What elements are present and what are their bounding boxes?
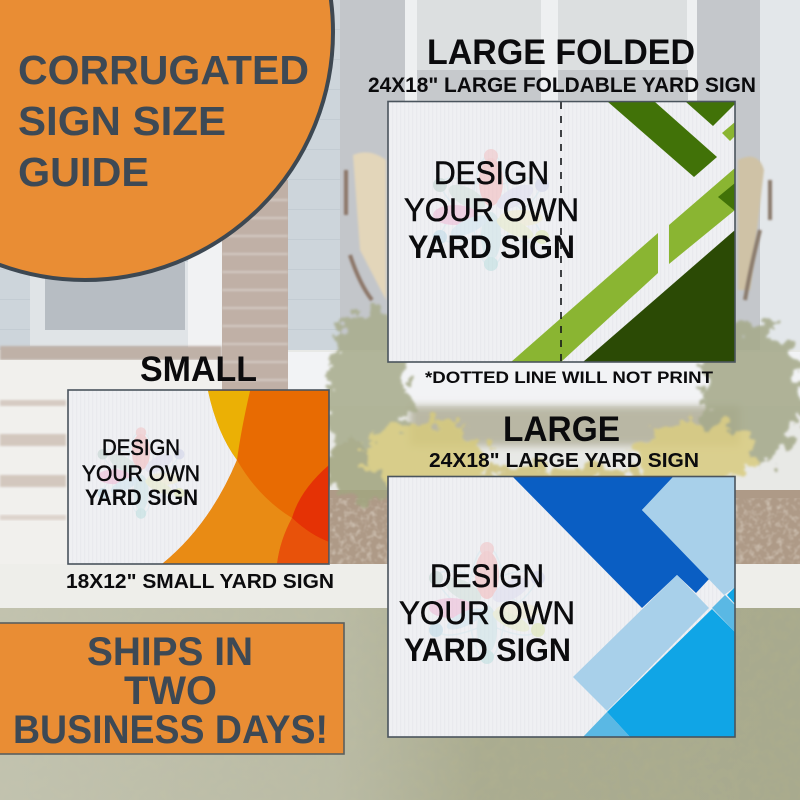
- orange curved design: [162, 390, 329, 564]
- green geometric design: [511, 102, 735, 362]
- callout: ships in two business days: BUSINESS DAYS!: [13, 708, 328, 752]
- panel: small sign: [68, 390, 329, 564]
- sign text: DESIGN: [102, 435, 180, 460]
- note: dotted line will not print: *DOTTED LINE WILL NOT PRINT: [425, 368, 714, 387]
- title: corrugated sign size guide: SIGN SIZE: [18, 98, 226, 144]
- heading: large: LARGE: [503, 410, 620, 449]
- callout: ships in two business days: [0, 623, 344, 754]
- panel: large folded sign: [388, 102, 735, 362]
- shrubs: [325, 310, 800, 500]
- heading: small: SMALL: [140, 350, 257, 389]
- heading: large folded: LARGE FOLDED: [427, 33, 695, 72]
- sign text: YOUR OWN: [399, 595, 575, 631]
- title badge: orange circle: [0, 0, 333, 280]
- icon: watermark logo: [433, 149, 549, 271]
- sign text: YARD SIGN: [408, 229, 575, 265]
- sign text: YOUR OWN: [82, 461, 200, 486]
- sign text: [82, 435, 200, 510]
- fold line: [560, 102, 562, 362]
- icon: watermark logo: [98, 427, 184, 519]
- sign text: YOUR OWN: [404, 192, 579, 228]
- panel: large sign: [388, 476, 735, 737]
- subheading: large size: 24X18" LARGE YARD SIGN: [429, 450, 699, 472]
- chairs: [353, 152, 386, 300]
- title: corrugated sign size guide: [18, 47, 309, 195]
- blue geometric design: [513, 477, 735, 737]
- sign text: DESIGN: [430, 558, 544, 594]
- icon: watermark logo: [429, 542, 545, 664]
- title: corrugated sign size guide: CORRUGATED: [18, 47, 309, 93]
- sign text: [404, 155, 579, 265]
- sign text: [399, 558, 575, 668]
- subheading: small size: 18X12" SMALL YARD SIGN: [66, 571, 334, 593]
- subheading: large folded size: 24X18" LARGE FOLDABLE YARD SIGN: [368, 74, 756, 97]
- callout: ships in two business days: TWO: [124, 669, 217, 713]
- sign text: DESIGN: [434, 155, 549, 191]
- callout: ships in two business days: SHIPS IN: [87, 630, 253, 674]
- sign text: YARD SIGN: [85, 485, 198, 510]
- title: corrugated sign size guide: GUIDE: [18, 149, 149, 195]
- sign text: YARD SIGN: [404, 632, 571, 668]
